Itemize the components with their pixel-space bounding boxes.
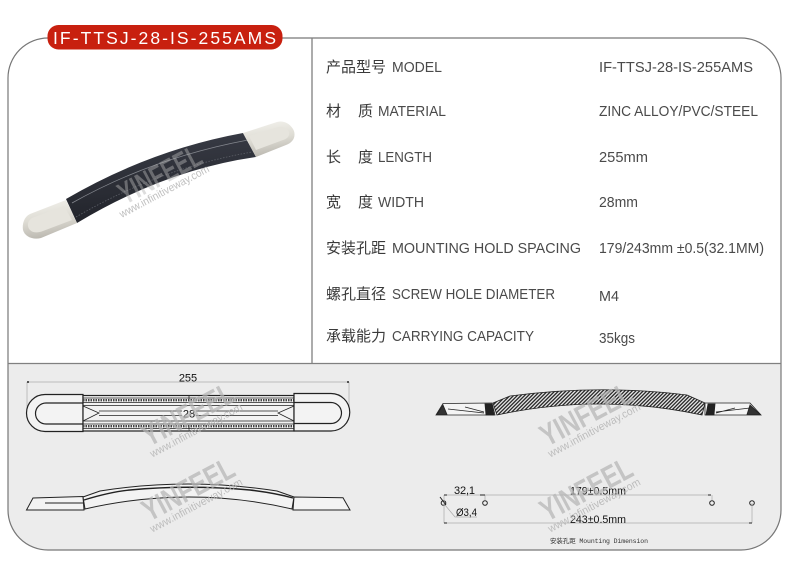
spec row: carrying capacity: 35kgs xyxy=(599,331,635,347)
side view left cap xyxy=(26,496,84,510)
section hatched body xyxy=(493,390,705,415)
spec row: material xyxy=(326,100,758,121)
spec row: length: 度 xyxy=(358,146,373,167)
side view right cap xyxy=(293,497,350,510)
handle left cap xyxy=(23,200,77,239)
spec row: model: MODEL xyxy=(392,60,442,76)
spec row: width: 宽 xyxy=(326,191,341,212)
spec row: material: ZINC ALLOY/PVC/STEEL xyxy=(599,104,758,120)
spec row: length: 255mm xyxy=(599,150,648,166)
panel divider: vertical xyxy=(311,38,313,363)
spec row: carrying capacity: 承载能力 xyxy=(326,325,386,346)
watermark: photo xyxy=(103,138,211,221)
mounting holes xyxy=(441,501,754,505)
watermark: top view xyxy=(133,375,245,461)
spec row: mounting hole spacing: 安装孔距 xyxy=(326,237,386,258)
spec row: screw hole diameter xyxy=(326,283,619,305)
product photo: handle xyxy=(23,121,295,239)
watermark: mounting dimensions: www.infinitiveway.com xyxy=(545,476,643,536)
watermark: cross section: YINFEEL xyxy=(534,375,639,453)
spec row: carrying capacity: CARRYING CAPACITY xyxy=(392,329,534,345)
spec row: material: 质 xyxy=(358,100,373,121)
top view grip xyxy=(83,396,294,431)
dimension diameter: Ø3,4 xyxy=(456,507,477,519)
spec row: material: MATERIAL xyxy=(378,104,446,120)
spec row: length xyxy=(326,146,648,167)
spec row: mounting hole spacing: MOUNTING HOLD SPACING xyxy=(392,241,581,257)
drawing: top view with dimensions xyxy=(26,372,350,432)
panel: bottom drawings background xyxy=(8,363,781,550)
dimension 179: 179±0.5mm xyxy=(570,486,626,498)
watermark: cross section xyxy=(531,375,643,461)
spec row: model: IF-TTSJ-28-IS-255AMS xyxy=(599,60,753,76)
dimension 255 xyxy=(27,372,349,410)
watermark: mounting dimensions xyxy=(531,450,643,536)
watermark: cross section: www.infinitiveway.com xyxy=(545,401,643,461)
spec row: material: 材 xyxy=(326,100,341,121)
handle leather grip xyxy=(66,133,256,223)
drawing: mounting dimensions xyxy=(440,485,754,545)
handle right cap xyxy=(243,121,295,157)
top view right cap xyxy=(294,394,350,431)
top view left cap xyxy=(26,394,83,432)
spec row: width: 28mm xyxy=(599,195,638,211)
dimension ticks xyxy=(440,495,752,523)
spec row: width: 度 xyxy=(358,191,373,212)
watermark: photo: www.infinitiveway.com xyxy=(117,163,211,221)
dimension lines xyxy=(444,495,752,523)
spec row: width: WIDTH xyxy=(378,195,424,211)
watermark: top view: YINFEEL xyxy=(136,375,241,453)
spec row: width xyxy=(326,191,638,212)
spec row: model xyxy=(326,56,753,77)
section left end xyxy=(436,403,495,415)
side view grip xyxy=(83,484,294,509)
spec row: length: LENGTH xyxy=(378,150,432,166)
spec row: screw hole diameter: SCREW HOLE DIAMETER xyxy=(392,287,555,303)
drawing: side view xyxy=(26,484,350,510)
top view grip: 28 xyxy=(183,408,195,420)
title pill: IF-TTSJ-28-IS-255AMS xyxy=(53,28,276,48)
spec row: length: 长 xyxy=(326,146,341,167)
section right end xyxy=(705,403,761,415)
spec row: carrying capacity xyxy=(326,325,635,347)
dimension 32,1: 32,1 xyxy=(454,485,475,497)
watermark: top view: www.infinitiveway.com xyxy=(147,401,245,461)
spec row: screw hole diameter: 螺孔直径 xyxy=(326,283,386,304)
watermark: mounting dimensions: YINFEEL xyxy=(534,450,639,528)
watermark: side view: www.infinitiveway.com xyxy=(147,476,245,536)
spec row: mounting hole spacing: 179/243mm ±0.5(32.1MM) xyxy=(599,241,764,257)
drawing: cross section xyxy=(436,390,761,415)
watermark: photo: YINFEEL xyxy=(112,138,208,211)
spec row: screw hole diameter: M4 xyxy=(599,289,619,305)
spec row: mounting hole spacing xyxy=(326,237,764,258)
caption: 安装孔距 Mounting Dimension xyxy=(550,536,648,545)
dimension 243: 243±0.5mm xyxy=(570,514,626,526)
watermark: side view: YINFEEL xyxy=(136,450,241,528)
watermark: side view xyxy=(133,450,245,536)
panel divider: horizontal xyxy=(8,362,781,364)
spec row: model: 产品型号 xyxy=(326,56,386,77)
dimension 255: 255 xyxy=(179,372,197,384)
